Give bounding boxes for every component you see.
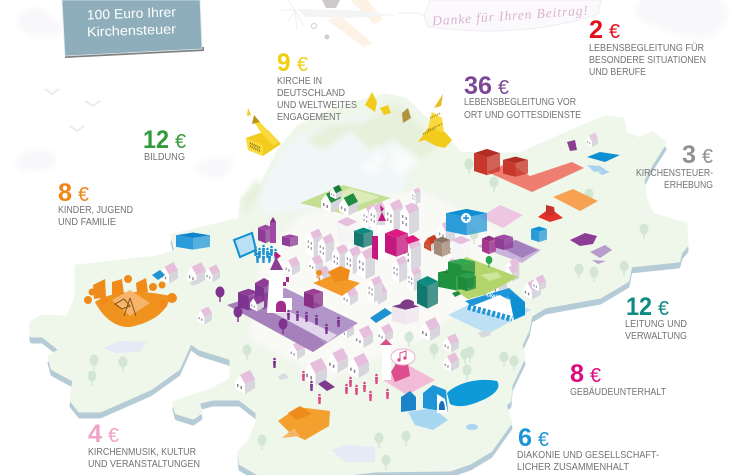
people on plaza xyxy=(216,286,340,391)
map: land shadow xyxy=(32,102,686,475)
label: 36 euro: ORT UND GOTTESDIENSTE xyxy=(464,109,581,121)
label: 9 euro: ENGAGEMENT xyxy=(277,111,341,123)
green school main: Bildung xyxy=(438,256,518,302)
orange town group xyxy=(313,266,360,296)
label: 12 euro Bildung: € xyxy=(175,131,186,153)
lakes and trees xyxy=(88,158,648,470)
purple right group xyxy=(570,233,612,264)
yellow church right xyxy=(365,92,452,148)
purple plaza xyxy=(227,288,358,352)
magenta church xyxy=(372,205,420,260)
label: 9 euro: UND WELTWEITES xyxy=(277,99,357,111)
label: 3 euro: € xyxy=(702,146,713,168)
label: 8 euro Kinder xyxy=(58,179,133,228)
label: 2 euro: BESONDERE SITUATIONEN xyxy=(589,54,706,66)
sign: 100 Euro Ihrer Kirchensteuer xyxy=(62,0,204,58)
orange mound: Kinder, Jugend und Familie xyxy=(84,275,177,327)
green school upper xyxy=(300,185,391,216)
label: 9 euro xyxy=(277,49,357,123)
label: 8 euro Gebäude: GEBÄUDEUNTERHALT xyxy=(570,386,666,398)
sign: 100 Euro Ihrer Kirchensteuer: 100 Euro Ihrer xyxy=(87,4,177,23)
label: 6 euro: LICHER ZUSAMMENHALT xyxy=(517,461,630,473)
plaza light stripe xyxy=(272,308,337,342)
label: 9 euro: KIRCHE IN xyxy=(277,75,322,87)
label: 36 euro xyxy=(464,72,581,121)
city halo and roads xyxy=(250,190,500,380)
label: 8 euro Gebäude: 8 xyxy=(570,360,584,388)
label: 12 euro Leitung: LEITUNG UND xyxy=(625,318,687,330)
clouds xyxy=(16,0,728,179)
label: 4 euro: € xyxy=(108,425,119,447)
label: 2 euro: 2 xyxy=(589,16,603,44)
birds xyxy=(45,89,100,131)
label: 9 euro: DEUTSCHLAND xyxy=(277,87,345,99)
purple domed building xyxy=(392,299,419,324)
sign: 100 Euro Ihrer Kirchensteuer: Kirchensteuer xyxy=(87,21,177,40)
label: 8 euro Gebäude xyxy=(570,360,666,398)
label: 4 euro xyxy=(88,420,200,470)
colored townhouses xyxy=(424,226,547,257)
map: land xyxy=(32,96,686,475)
label: 8 euro Kinder: 8 xyxy=(58,179,72,207)
label: 6 euro: DIAKONIE UND GESELLSCHAFT- xyxy=(517,449,659,461)
label: 36 euro: 36 xyxy=(464,72,492,100)
label: 4 euro: UND VERANSTALTUNGEN xyxy=(88,458,200,470)
label: 2 euro: € xyxy=(609,21,620,43)
pink music church xyxy=(380,339,435,395)
label: 12 euro Leitung xyxy=(625,293,687,342)
label: 6 euro: € xyxy=(538,429,549,451)
label: 36 euro: LEBENSBEGLEITUNG VOR xyxy=(464,96,576,108)
red school xyxy=(474,149,584,192)
label: 4 euro: KIRCHENMUSIK, KULTUR xyxy=(88,446,196,458)
label: 9 euro: 9 xyxy=(277,49,290,77)
label: 6 euro: 6 xyxy=(518,424,532,452)
label: 12 euro Bildung: BILDUNG xyxy=(144,151,185,163)
orange camp xyxy=(278,406,330,440)
hospital xyxy=(446,209,487,235)
label: 9 euro: € xyxy=(297,54,308,76)
Diakonie building xyxy=(448,288,531,334)
label: 6 euro xyxy=(517,424,659,473)
cars xyxy=(152,270,491,391)
pink plaza upper xyxy=(480,205,523,228)
label: 12 euro Bildung: 12 xyxy=(143,126,169,154)
banner: Danke für Ihren Beitrag: Danke für Ihren Beitrag! xyxy=(431,3,588,28)
teal block xyxy=(354,228,373,248)
pink people xyxy=(302,371,389,404)
blue stage and people xyxy=(234,233,277,263)
label: 2 euro: LEBENSBEGLEITUNG FÜR xyxy=(589,42,704,54)
label: 4 euro: 4 xyxy=(88,420,102,448)
map: Europe sea and green patches xyxy=(220,90,440,215)
label: 12 euro Leitung: € xyxy=(658,298,669,320)
blue factory xyxy=(176,233,210,250)
label: 3 euro xyxy=(636,141,713,191)
airplane xyxy=(281,0,418,47)
red house and orange field xyxy=(538,189,598,222)
tall white buildings xyxy=(337,217,471,262)
purple square xyxy=(477,234,541,282)
yellow church left: Kirche in Deutschland xyxy=(246,108,281,156)
purple church: Lebensbegleitung xyxy=(238,252,323,313)
label: 12 euro Bildung xyxy=(143,126,186,163)
label: 8 euro Gebäude: € xyxy=(590,365,601,387)
label: 8 euro Kinder: € xyxy=(78,184,89,206)
blue pond upper right xyxy=(567,133,620,175)
label: 3 euro: 3 xyxy=(682,141,696,169)
teal tower: Leitung und Verwaltung xyxy=(417,276,438,309)
purple upper chapel xyxy=(258,217,298,247)
white city houses xyxy=(160,188,546,394)
plaza lower lavender xyxy=(227,292,325,352)
label: 12 euro Leitung: VERWALTUNG xyxy=(625,330,687,342)
label: 2 euro: UND BERUFE xyxy=(589,66,646,78)
label: 2 euro xyxy=(589,16,706,78)
label: 8 euro Kinder: KINDER, JUGEND xyxy=(58,204,133,216)
Diakonie building: Diakonie xyxy=(485,292,512,305)
label: 36 euro: € xyxy=(498,77,509,99)
label: 8 euro Kinder: UND FAMILIE xyxy=(58,216,116,228)
label: 12 euro Leitung: 12 xyxy=(626,293,652,321)
label: 3 euro: ERHEBUNG xyxy=(664,179,713,191)
blue church and pool: Diakonie xyxy=(401,380,498,430)
label: 3 euro: KIRCHENSTEUER- xyxy=(636,167,713,179)
